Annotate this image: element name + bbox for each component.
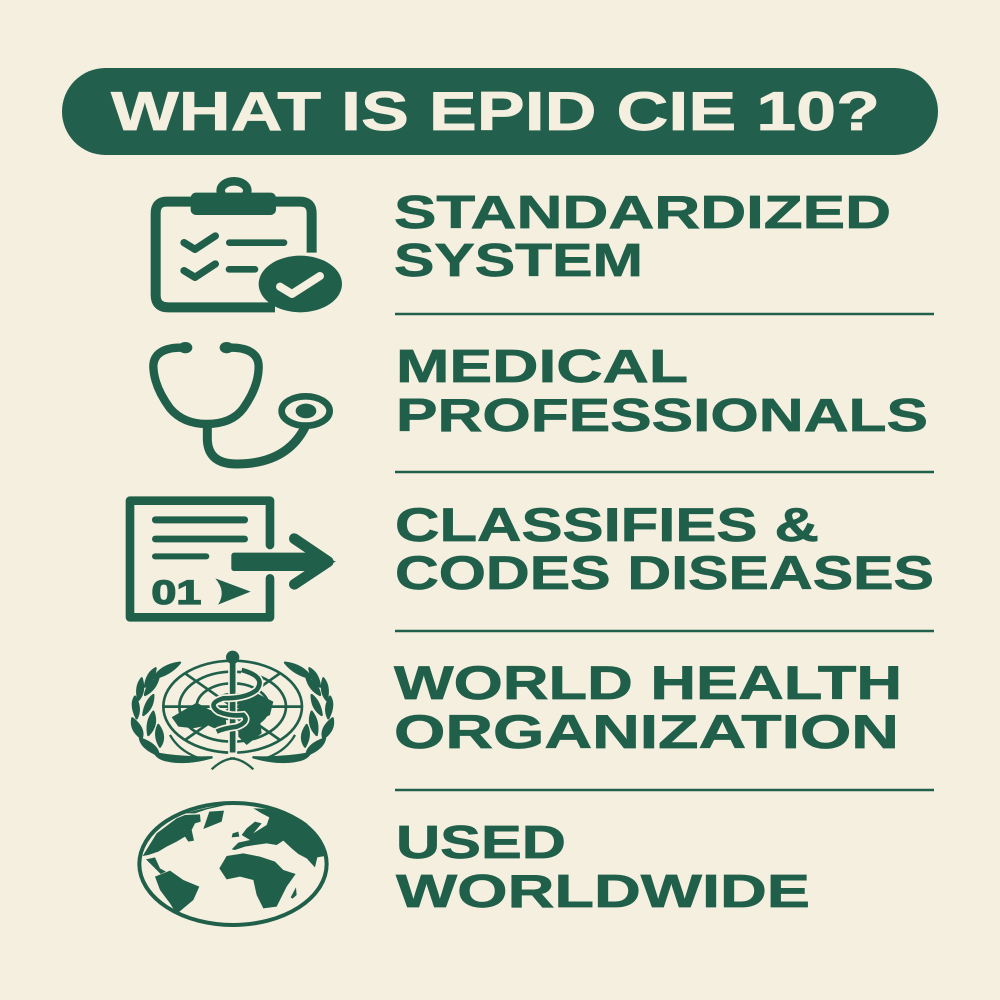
heading: classifies and codes diseases: CLASSIFIES & [395, 498, 819, 551]
icon: coded document with arrow: 01 [151, 574, 201, 612]
heading: used worldwide: USED [396, 816, 566, 868]
heading: standardized system: STANDARDIZED [394, 186, 891, 238]
heading: medical professionals [396, 340, 928, 441]
heading: world health organization: ORGANIZATION [394, 705, 899, 758]
heading: classifies and codes diseases [395, 498, 934, 599]
heading: classifies and codes diseases: CODES DISEASES [395, 546, 934, 599]
heading: standardized system [394, 186, 891, 286]
heading: standardized system: SYSTEM [394, 234, 643, 286]
heading: world health organization [394, 656, 902, 758]
icon: globe [139, 803, 327, 925]
icon: stethoscope [153, 342, 330, 464]
icon: clipboard with checklist [156, 181, 342, 312]
heading: medical professionals: MEDICAL [396, 340, 688, 392]
icon: world health organization emblem [132, 651, 333, 769]
icon: coded document with arrow [130, 501, 336, 617]
heading: used worldwide [396, 816, 810, 917]
title banner [62, 68, 938, 155]
heading: medical professionals: PROFESSIONALS [396, 389, 928, 441]
title banner: WHAT IS EPID CIE 10? [111, 80, 880, 142]
heading: world health organization: WORLD HEALTH [394, 656, 902, 709]
heading: used worldwide: WORLDWIDE [396, 865, 810, 917]
